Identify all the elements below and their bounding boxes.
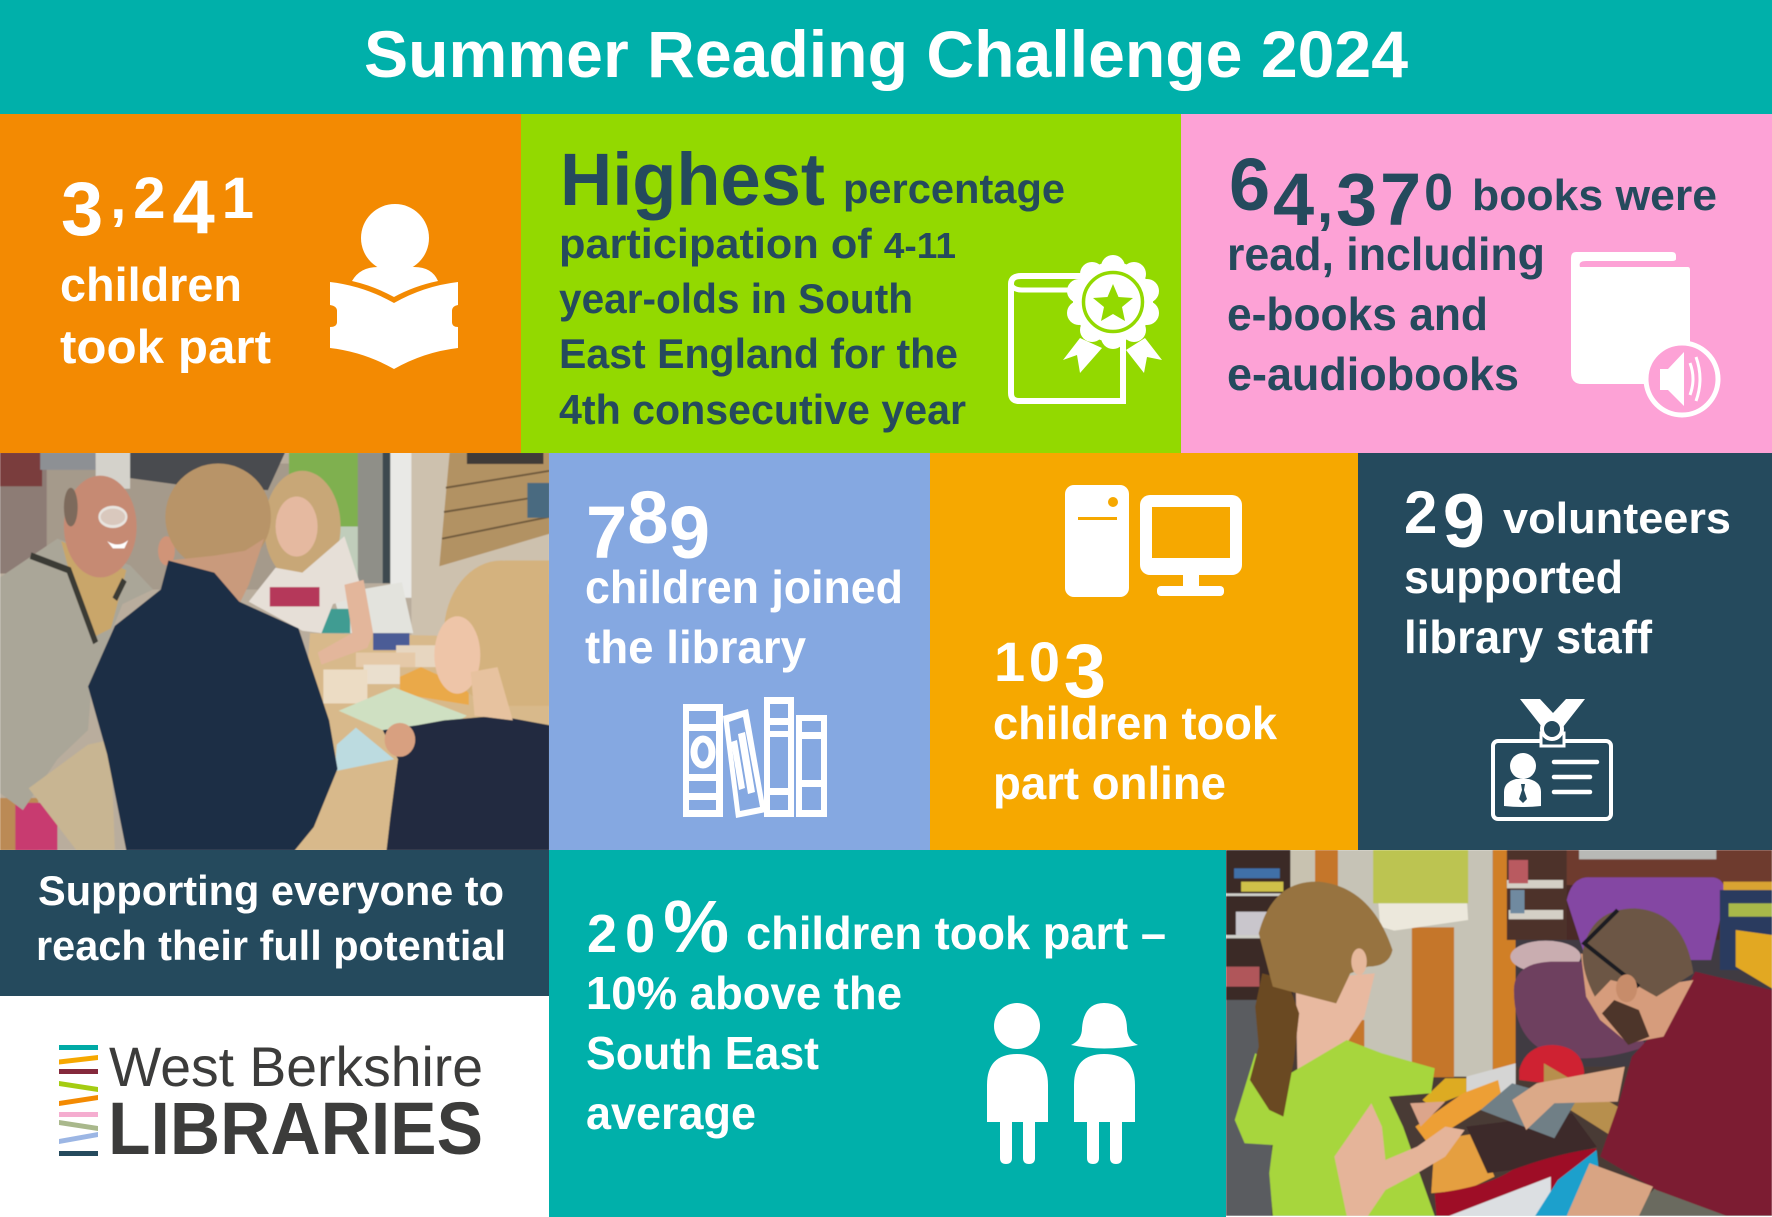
panel: 64,370 books xyxy=(1181,114,1772,453)
icon: boy and girl xyxy=(987,1003,1138,1164)
icon: child reading xyxy=(330,204,458,369)
text: participation description: East England for the xyxy=(559,330,958,377)
icon: logo stripes xyxy=(59,1045,98,1156)
heading: Highest percentage: Highest xyxy=(560,138,825,221)
stat: 29: 2 xyxy=(1404,479,1437,546)
panel: supporting everyone banner: Supporting everyone to xyxy=(38,867,504,914)
panel: 103 children online xyxy=(930,453,1358,850)
stat: 64,370: 7 xyxy=(1380,158,1421,241)
icon: books on a shelf xyxy=(683,697,827,818)
panel: 20% children took part xyxy=(549,850,1226,1217)
panel: 789 children joined xyxy=(549,453,930,850)
stat: 3,241: 2 xyxy=(133,166,166,231)
stat: 29: 9 xyxy=(1443,479,1485,564)
text: above South East average: South East xyxy=(586,1027,819,1079)
stat: 64,370: 4 xyxy=(1273,158,1314,241)
text: participation description: participation of 4-11 xyxy=(559,220,956,267)
stat: 3,241: , xyxy=(110,166,126,231)
text: children took part xyxy=(60,258,271,373)
text: above South East average xyxy=(586,907,1166,1139)
icon: desktop computer xyxy=(1065,485,1242,597)
panel: 29 volunteers xyxy=(1358,453,1772,850)
panel: supporting everyone banner: reach their full potential xyxy=(36,922,506,969)
stat: 64,370: 0 xyxy=(1424,164,1453,222)
text: participation description xyxy=(559,220,966,433)
stat: 64,370: , xyxy=(1317,170,1333,235)
title banner: Summer Reading Challenge 2024 xyxy=(364,17,1408,91)
stat: 20%: 20% xyxy=(587,885,729,968)
text: children took part online xyxy=(993,697,1277,809)
heading: Highest percentage xyxy=(560,138,1065,221)
text: volunteers supported library staff: volunteers xyxy=(1503,494,1731,543)
text: above South East average: children took part – xyxy=(746,907,1166,959)
stat: 789: 8 xyxy=(627,476,669,559)
text: above South East average: average xyxy=(586,1087,756,1139)
stat: 64,370: 6 xyxy=(1229,143,1270,226)
stat: 3,241: 4 xyxy=(173,165,215,250)
panel: supporting everyone banner xyxy=(0,850,549,996)
icon: audiobook xyxy=(1571,252,1718,415)
text: children took part: children xyxy=(60,258,242,311)
photo: mayor and children at a library table xyxy=(0,452,559,850)
text: children took part: took part xyxy=(60,320,271,373)
text: volunteers supported library staff xyxy=(1404,494,1731,663)
stat: 789: 9 xyxy=(669,491,710,574)
text: volunteers supported library staff: library staff xyxy=(1404,611,1653,663)
stat: 3,241: 1 xyxy=(222,166,254,231)
text: children joined the library: children joined xyxy=(585,561,903,613)
text: children took part online: part online xyxy=(993,757,1226,809)
photo: girl and father choosing books xyxy=(1226,850,1772,1217)
text: books were read: e-books and xyxy=(1227,288,1488,340)
text: volunteers supported library staff: supported xyxy=(1404,551,1623,603)
panel: highest participation xyxy=(521,114,1181,453)
text: participation description: 4th consecutive year xyxy=(559,386,966,433)
stat: 64,370: 3 xyxy=(1336,158,1377,241)
panel: 3,241 children xyxy=(0,114,521,453)
text: books were read: read, including xyxy=(1227,228,1545,280)
text: children took part online: children took xyxy=(993,697,1277,749)
logo: West Berkshire Libraries: West Berkshire xyxy=(109,1035,483,1098)
stat: 103: 10 xyxy=(994,630,1060,693)
text: books were read: books were xyxy=(1472,171,1717,220)
text: participation description: year-olds in South xyxy=(559,275,913,322)
icon: book with rosette xyxy=(1011,255,1162,401)
stat: 3,241: 3 xyxy=(61,167,103,252)
stat: 103: 3 xyxy=(1064,629,1106,714)
text: above South East average: 10% above the xyxy=(586,967,902,1019)
icon: volunteer ID badge xyxy=(1493,699,1611,819)
text: books were read: e-audiobooks xyxy=(1227,348,1519,400)
text: children joined the library: the library xyxy=(585,621,806,673)
logo: West Berkshire Libraries xyxy=(59,1035,483,1170)
heading: Highest percentage: percentage xyxy=(843,165,1065,212)
title banner xyxy=(0,0,1772,114)
logo: West Berkshire Libraries: LIBRARIES xyxy=(108,1087,483,1170)
stat: 789: 7 xyxy=(586,491,627,574)
text: children joined the library xyxy=(585,561,903,673)
text: books were read xyxy=(1227,171,1717,400)
